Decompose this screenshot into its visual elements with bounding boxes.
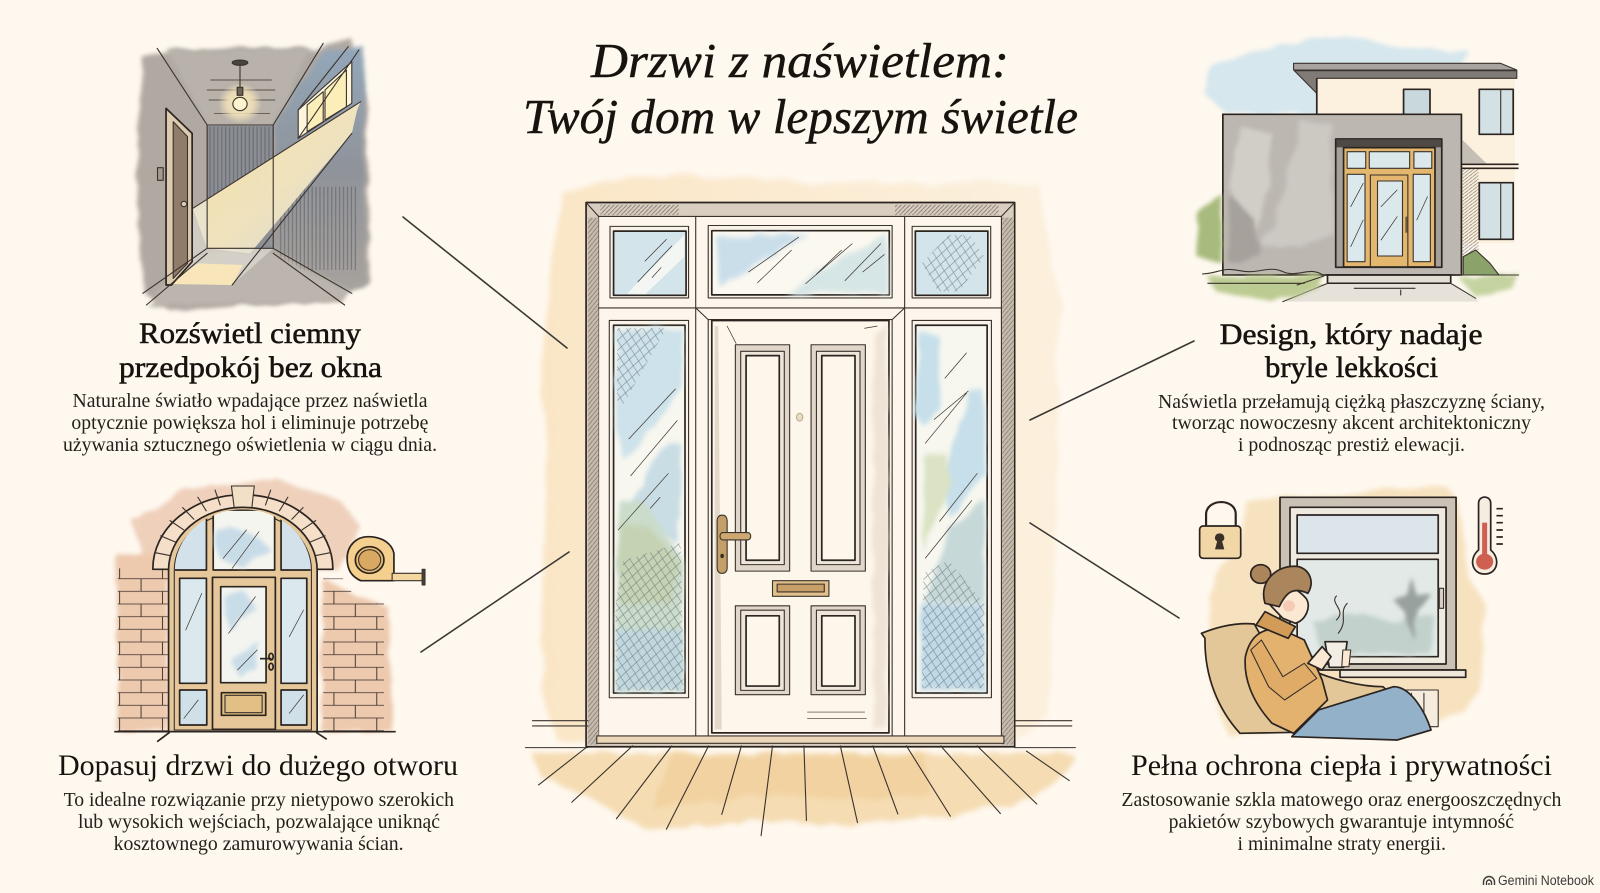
title bbox=[523, 33, 1078, 144]
window bbox=[1280, 497, 1466, 677]
text: opening: To idealne rozwiązanie przy nietypowo szerokich bbox=[64, 789, 454, 811]
left sidelight bbox=[609, 320, 689, 698]
icon: thermometer bbox=[1473, 497, 1503, 574]
heading: design bbox=[1220, 318, 1483, 384]
leader lines bbox=[403, 217, 1194, 652]
text: protection: i minimalne straty energii. bbox=[1238, 833, 1446, 855]
text: protection: Zastosowanie szkla matowego oraz energooszczędnych bbox=[1121, 789, 1561, 811]
stone arch bbox=[153, 486, 333, 570]
steps and path bbox=[1283, 275, 1479, 302]
text: protection: pakietów szybowych gwarantuje intymność bbox=[1169, 811, 1514, 833]
jeans bbox=[1292, 687, 1431, 740]
door frame bbox=[586, 203, 1015, 747]
glazed entrance bbox=[1336, 139, 1442, 267]
bulb bbox=[218, 60, 262, 124]
heading: hallway bbox=[119, 317, 382, 384]
heading: hallway: Rozświetl ciemny bbox=[139, 317, 361, 350]
heading: design: Design, który nadaje bbox=[1220, 318, 1483, 351]
title: Twój dom w lepszym świetle bbox=[523, 89, 1078, 144]
head and hair bbox=[1251, 565, 1311, 623]
ground line bbox=[114, 732, 396, 742]
text: opening bbox=[64, 789, 454, 855]
text: hallway bbox=[63, 390, 437, 456]
heading: hallway: przedpokój bez okna bbox=[119, 351, 382, 384]
wall wash bbox=[541, 174, 1059, 738]
greenery bbox=[1197, 193, 1519, 300]
illustration: woman by the window bbox=[1200, 483, 1503, 740]
grey wall bbox=[1223, 114, 1461, 275]
floor wash bbox=[531, 753, 1074, 829]
heading: protection: Pełna ochrona ciepła i prywatności bbox=[1131, 749, 1552, 782]
skirting and floor boards bbox=[525, 721, 1075, 836]
icon: padlock bbox=[1200, 502, 1241, 558]
brick courses bbox=[118, 568, 384, 732]
light beam bbox=[193, 102, 361, 253]
window bbox=[298, 62, 352, 138]
transom right glass bbox=[912, 226, 991, 298]
text: hallway: Naturalne światło wpadające przez naświetla bbox=[72, 390, 428, 412]
central door illustration bbox=[525, 174, 1075, 836]
illustration: arched door in brick wall bbox=[114, 480, 425, 742]
text: design: i podnosząc prestiż elewacji. bbox=[1238, 434, 1465, 456]
transom left glass bbox=[610, 226, 689, 298]
heading: design: bryle lekkości bbox=[1265, 351, 1438, 384]
side door bbox=[157, 108, 192, 285]
text: opening: lub wysokich wejściach, pozwalające uniknąć bbox=[78, 811, 440, 833]
illustration: modern house bbox=[1197, 35, 1519, 302]
text: design: tworząc nowoczesny akcent architektoniczny bbox=[1172, 412, 1532, 434]
watermark: Gemini Notebook: Gemini Notebook bbox=[1498, 873, 1594, 888]
transom centre glass bbox=[708, 226, 892, 298]
text: opening: kosztownego zamurowywania ścian. bbox=[114, 833, 404, 855]
heading: opening: Dopasuj drzwi do dużego otworu bbox=[58, 749, 458, 782]
sleeve bbox=[1251, 640, 1317, 700]
right sidelight bbox=[912, 320, 991, 698]
door leaf bbox=[712, 320, 889, 733]
text: hallway: optycznie powiększa hol i eliminuje potrzebę bbox=[71, 412, 428, 434]
hands and mug bbox=[1308, 596, 1351, 670]
armchair bbox=[1201, 624, 1429, 733]
arched door frame bbox=[169, 507, 317, 732]
illustration: dark hallway bbox=[136, 37, 368, 312]
peephole bbox=[796, 413, 803, 421]
door handle bbox=[717, 515, 751, 573]
radiator bbox=[1397, 690, 1438, 727]
text: hallway: używania sztucznego oświetlenia w ciągu dnia. bbox=[63, 434, 437, 456]
upper storey bbox=[1294, 63, 1519, 255]
icon: tape measure bbox=[347, 537, 425, 585]
letter slot bbox=[772, 581, 829, 596]
text: protection bbox=[1121, 789, 1561, 855]
title: Drzwi z naświetlem: bbox=[590, 33, 1009, 88]
text: design bbox=[1158, 391, 1545, 456]
door panels bbox=[735, 345, 865, 695]
text: design: Naświetla przełamują ciężką płaszczyznę ściany, bbox=[1158, 391, 1545, 413]
sweater bbox=[1245, 629, 1327, 733]
